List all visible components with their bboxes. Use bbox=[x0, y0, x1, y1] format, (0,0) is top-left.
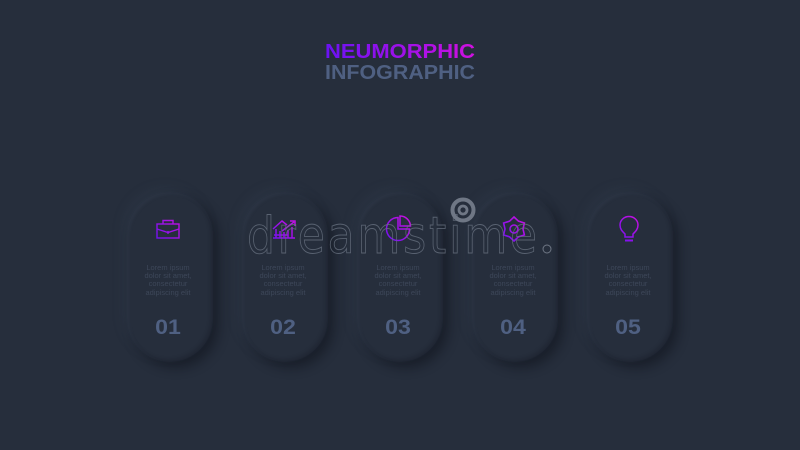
text: description 01: dolor sit amet, bbox=[144, 271, 192, 280]
panel: step 01 bbox=[144, 208, 220, 368]
text: description 01: Lorem ipsum bbox=[146, 263, 190, 272]
text: description 04: consectetur bbox=[494, 279, 532, 288]
icon: pie chart bbox=[386, 215, 412, 242]
panel: step 05 bbox=[600, 208, 680, 368]
icon: house chart bbox=[272, 220, 296, 239]
text: description 05 bbox=[604, 263, 652, 297]
title: NEUMORPHIC bbox=[325, 41, 475, 63]
text: description 03: dolor sit amet, bbox=[374, 271, 422, 280]
text: description 05: adipiscing elit bbox=[605, 288, 651, 297]
number 01: 01 bbox=[155, 316, 181, 339]
icon: light bulb bbox=[619, 216, 639, 242]
text: description 01 bbox=[144, 263, 192, 297]
text: description 03: adipiscing elit bbox=[375, 288, 421, 297]
icon: briefcase bbox=[156, 220, 180, 239]
text: description 04: Lorem ipsum bbox=[491, 263, 535, 272]
text: description 02: consectetur bbox=[264, 279, 302, 288]
text: description 05: dolor sit amet, bbox=[604, 271, 652, 280]
text: description 02: Lorem ipsum bbox=[261, 263, 305, 272]
text: description 03: Lorem ipsum bbox=[376, 263, 420, 272]
icon: gear bbox=[502, 216, 526, 242]
number 05: 05 bbox=[615, 316, 641, 339]
text: description 01: consectetur bbox=[149, 279, 187, 288]
panel: step 02 bbox=[256, 208, 335, 368]
text: description 02 bbox=[259, 263, 307, 297]
watermark: dreamstime bbox=[247, 207, 537, 266]
number 03: 03 bbox=[385, 316, 411, 339]
title: INFOGRAPHIC bbox=[325, 62, 475, 84]
text: description 04 bbox=[489, 263, 537, 297]
text: description 03: consectetur bbox=[379, 279, 417, 288]
text: description 04: adipiscing elit bbox=[490, 288, 536, 297]
text: description 02: adipiscing elit bbox=[260, 288, 306, 297]
panel: step 04 bbox=[486, 208, 565, 368]
panel: step 03 bbox=[370, 208, 450, 368]
number 02: 02 bbox=[270, 316, 296, 339]
text: description 01: adipiscing elit bbox=[145, 288, 191, 297]
number 04: 04 bbox=[500, 316, 526, 339]
text: description 05: Lorem ipsum bbox=[606, 263, 650, 272]
text: description 02: dolor sit amet, bbox=[259, 271, 307, 280]
text: description 05: consectetur bbox=[609, 279, 647, 288]
text: description 04: dolor sit amet, bbox=[489, 271, 537, 280]
title bbox=[325, 41, 475, 84]
text: description 03 bbox=[374, 263, 422, 297]
